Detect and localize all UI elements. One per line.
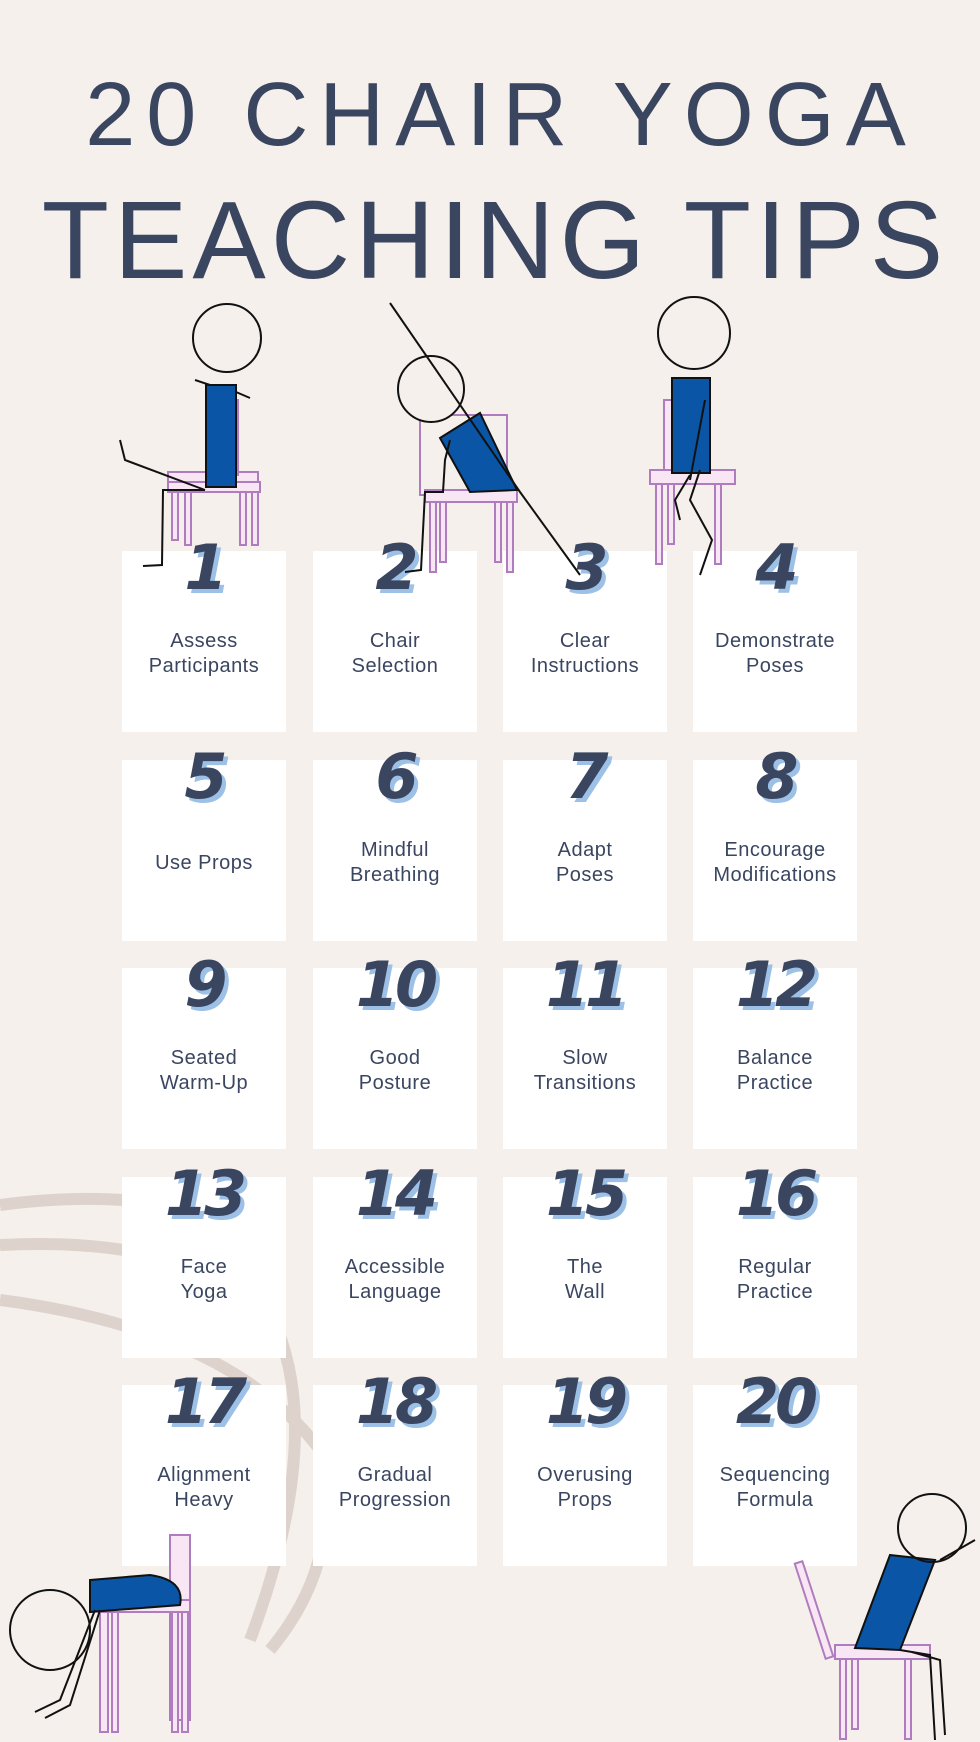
title line 1: 20 CHAIR YOGA xyxy=(85,65,917,165)
card 7 xyxy=(503,760,667,941)
card 12: Balance xyxy=(737,1047,813,1069)
card 18: Gradual xyxy=(358,1464,432,1486)
card 9: Warm-Up xyxy=(160,1072,248,1094)
figure 1: seated leg raise xyxy=(120,304,261,566)
card 9 xyxy=(122,968,286,1149)
card 8: Modifications xyxy=(713,864,837,886)
card 14: 14 xyxy=(356,1157,434,1230)
card 10: 10 xyxy=(356,948,434,1021)
card 6: Breathing xyxy=(350,864,440,886)
card 6: Mindful xyxy=(361,839,429,861)
card 12: 12 xyxy=(736,948,814,1021)
card 20: Formula xyxy=(737,1489,813,1511)
card 7: Adapt xyxy=(558,839,612,861)
card 14 xyxy=(313,1177,477,1358)
card 12: Practice xyxy=(737,1072,813,1094)
card 2: Selection xyxy=(352,655,438,677)
card 19: Props xyxy=(558,1489,612,1511)
card 1: 1 xyxy=(184,531,224,604)
card 1: Assess xyxy=(170,630,238,652)
card 16: Regular xyxy=(738,1256,812,1278)
card 10: Posture xyxy=(359,1072,431,1094)
card 2: Chair xyxy=(370,630,420,652)
card 19 xyxy=(503,1385,667,1566)
card 5 xyxy=(122,760,286,941)
card 11: 11 xyxy=(546,948,624,1021)
card 4: Demonstrate xyxy=(715,630,835,652)
card 3: Clear xyxy=(560,630,610,652)
card 19: 19 xyxy=(546,1365,624,1438)
card 4 xyxy=(693,551,857,732)
card 14: Language xyxy=(348,1281,441,1303)
card 8 xyxy=(693,760,857,941)
card 13: 13 xyxy=(165,1157,243,1230)
card 12 xyxy=(693,968,857,1149)
card 18: 18 xyxy=(356,1365,434,1438)
card 15: The xyxy=(567,1256,603,1278)
card 13: Face xyxy=(181,1256,227,1278)
card 5: 5 xyxy=(184,740,224,813)
card 9: Seated xyxy=(171,1047,237,1069)
card 15: Wall xyxy=(565,1281,605,1303)
card 19: Overusing xyxy=(537,1464,633,1486)
card 2 xyxy=(313,551,477,732)
card 17: Alignment xyxy=(157,1464,251,1486)
card 1: Participants xyxy=(149,655,259,677)
card 1 xyxy=(122,551,286,732)
card 16 xyxy=(693,1177,857,1358)
card 11: Transitions xyxy=(534,1072,636,1094)
card 3: 3 xyxy=(565,531,605,604)
card 20: Sequencing xyxy=(720,1464,830,1486)
card 6 xyxy=(313,760,477,941)
card 18: Progression xyxy=(339,1489,451,1511)
grid of tip cards xyxy=(122,531,857,1566)
card 15: 15 xyxy=(546,1157,624,1230)
card 4: Poses xyxy=(746,655,804,677)
card 20: 20 xyxy=(736,1365,814,1438)
card 11 xyxy=(503,968,667,1149)
card 3: Instructions xyxy=(531,655,639,677)
figure 4: forward fold bottom left xyxy=(10,1535,190,1732)
card 2: 2 xyxy=(375,531,415,604)
card 14: Accessible xyxy=(345,1256,445,1278)
card 18 xyxy=(313,1385,477,1566)
figure 2: side stretch xyxy=(390,303,580,575)
card 13 xyxy=(122,1177,286,1358)
card 10 xyxy=(313,968,477,1149)
card 17 xyxy=(122,1385,286,1566)
figure 3: seated twist xyxy=(650,297,735,575)
card 5: Use Props xyxy=(155,852,253,874)
card 8: 8 xyxy=(755,740,795,813)
card 16: 16 xyxy=(736,1157,814,1230)
card 15 xyxy=(503,1177,667,1358)
card 4: 4 xyxy=(755,531,795,604)
card 16: Practice xyxy=(737,1281,813,1303)
card 7: 7 xyxy=(565,740,605,813)
card 9: 9 xyxy=(184,948,224,1021)
card 3 xyxy=(503,551,667,732)
card 8: Encourage xyxy=(724,839,826,861)
figure 5: reclined stretch bottom right xyxy=(795,1494,975,1740)
card 13: Yoga xyxy=(181,1281,227,1303)
card 17: Heavy xyxy=(174,1489,234,1511)
card 6: 6 xyxy=(375,740,415,813)
card 7: Poses xyxy=(556,864,614,886)
card 10: Good xyxy=(370,1047,420,1069)
card 20 xyxy=(693,1385,857,1566)
card 17: 17 xyxy=(165,1365,243,1438)
title line 2: TEACHING TIPS xyxy=(42,179,948,302)
card 11: Slow xyxy=(562,1047,608,1069)
